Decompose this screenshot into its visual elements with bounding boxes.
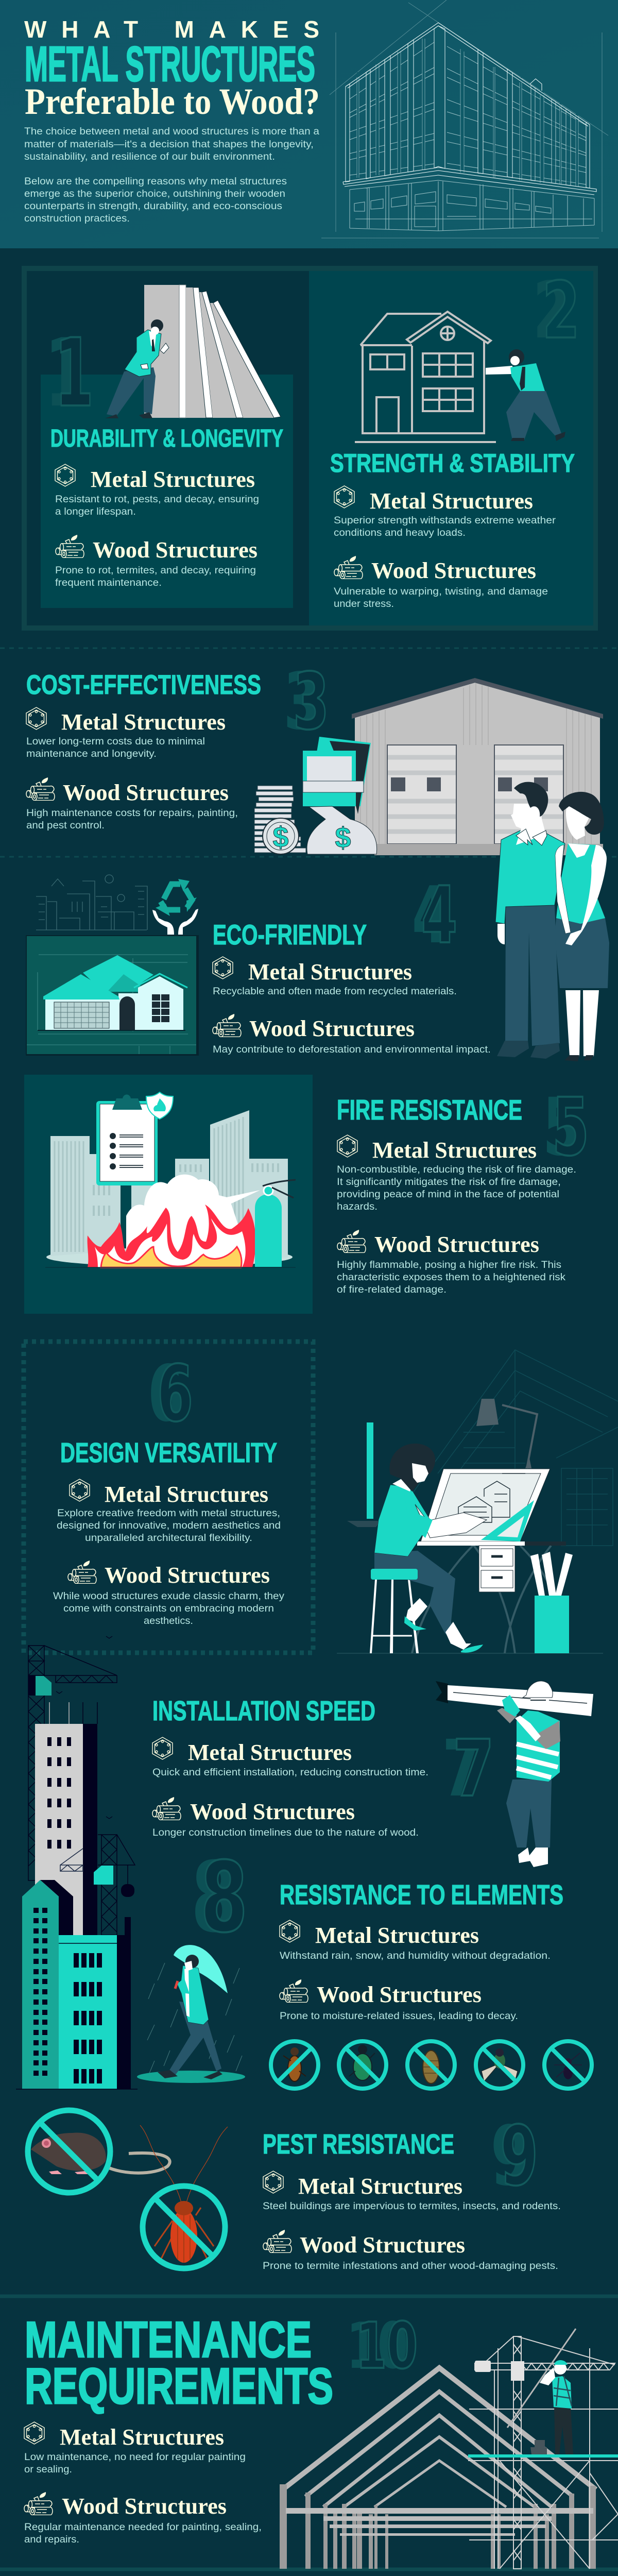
block: metal fire: Non-combustible, reducing the risk of fire damage.	[337, 1164, 576, 1175]
panel: resistance to elements	[137, 1841, 592, 2089]
block: wood cost: Wood Structures	[63, 780, 229, 805]
block: wood durability	[55, 535, 258, 588]
illustration: no cockroach	[140, 2125, 228, 2268]
heading: fire resistance: FIRE RESISTANCE	[337, 1094, 522, 1126]
block: wood eco: Wood Structures	[249, 1016, 415, 1041]
heading: maintenance requirements	[25, 2311, 333, 2414]
heading: design versatility: DESIGN VERSATILITY	[60, 1437, 277, 1468]
illustration: building fire and extinguisher	[45, 1092, 296, 1267]
title: preferable to wood: Preferable to Wood?	[25, 81, 320, 122]
illustration: house blueprint card	[26, 935, 199, 1056]
block: metal pests: Metal Structures	[298, 2174, 462, 2199]
panel: installation speed	[16, 1636, 593, 2089]
icon: no green beetle	[339, 2041, 386, 2089]
block: metal durability	[55, 464, 259, 517]
block: wood durability: frequent maintenance.	[55, 577, 162, 588]
number 3: 3	[293, 656, 329, 747]
illustration: faint blueprint background	[412, 1350, 618, 1653]
block: wood elements	[280, 1979, 518, 2022]
block: wood cost	[26, 777, 238, 831]
illustration: construction towers	[16, 1636, 138, 2089]
number 8: 8	[191, 1841, 238, 1954]
block: wood maintenance: Wood Structures	[62, 2494, 227, 2519]
number 1: 1	[55, 318, 94, 428]
illustration: man holding falling panels	[105, 285, 281, 418]
block: metal strength: Metal Structures	[370, 488, 533, 514]
number 9: 9	[500, 2109, 538, 2204]
icon: no beetle	[271, 2041, 318, 2089]
icons: no-pest row	[271, 2041, 592, 2089]
intro text	[24, 126, 319, 224]
illustration: city outline	[36, 875, 147, 930]
title: metal structures: METAL STRUCTURES	[25, 37, 315, 92]
illustration: blueprint building	[321, 0, 608, 238]
illustration: no rat	[28, 2110, 170, 2193]
number 5: 5	[552, 1081, 589, 1174]
block: metal cost	[26, 707, 226, 759]
number 5: 5	[543, 1081, 580, 1174]
block: metal pests: Steel buildings are impervious to termites, insects, and rodents.	[263, 2200, 561, 2212]
block: wood design: While wood structures exude classic charm, they	[53, 1590, 284, 1602]
block: metal durability: Metal Structures	[91, 467, 255, 492]
number 4: 4	[412, 870, 448, 961]
block: wood durability: Wood Structures	[93, 537, 258, 563]
block: wood design: Wood Structures	[105, 1563, 270, 1588]
block: metal strength: conditions and heavy loads.	[334, 527, 466, 538]
block: metal installation	[152, 1737, 428, 1778]
block: wood maintenance	[24, 2492, 262, 2545]
block: wood design: come with constraints on embracing modern	[63, 1603, 274, 1614]
block: wood fire: of fire-related damage.	[337, 1284, 447, 1295]
heading: maintenance requirements: MAINTENANCE	[25, 2311, 312, 2368]
number 2: 2	[533, 265, 571, 356]
block: metal design: Explore creative freedom with metal structures,	[57, 1507, 280, 1519]
intro text: The choice between metal and wood structures is more than a	[24, 126, 319, 137]
block: metal fire	[337, 1135, 576, 1212]
illustration: couple	[495, 782, 609, 1061]
number 1: 1	[45, 318, 84, 428]
number 3: 3	[284, 656, 320, 747]
illustration: steel frame with scaffold	[280, 2329, 618, 2569]
block: metal installation: Metal Structures	[188, 1740, 352, 1765]
block: wood elements: Prone to moisture-related issues, leading to decay.	[280, 2010, 518, 2022]
block: metal cost: Metal Structures	[61, 709, 226, 735]
block: metal pests	[263, 2171, 561, 2212]
block: wood installation: Wood Structures	[190, 1799, 355, 1824]
intro text: Below are the compelling reasons why metal structures	[24, 176, 287, 187]
block: wood cost: and pest control.	[26, 820, 105, 831]
panel: fire resistance	[24, 1075, 589, 1314]
icon: no termite	[407, 2041, 455, 2089]
block: wood maintenance: Regular maintenance needed for painting, sealing,	[24, 2521, 262, 2533]
block: wood strength	[334, 556, 548, 609]
intro text: construction practices.	[24, 213, 130, 224]
illustration: man pushing house	[355, 312, 565, 442]
block: wood fire: Wood Structures	[374, 1232, 539, 1257]
panel: eco-friendly	[26, 870, 491, 1056]
block: metal strength	[334, 486, 556, 538]
block: wood strength: Vulnerable to warping, twisting, and damage	[334, 586, 548, 597]
block: wood strength: Wood Structures	[371, 558, 536, 583]
block: wood design	[53, 1561, 284, 1626]
block: metal elements	[280, 1920, 551, 1961]
block: metal strength: Superior strength withstands extreme weather	[334, 515, 556, 526]
block: metal maintenance: or sealing.	[24, 2464, 72, 2475]
block: metal maintenance: Metal Structures	[60, 2425, 224, 2450]
intro text: sustainability, and resilience of our built environment.	[24, 151, 275, 162]
block: wood maintenance: and repairs.	[24, 2534, 79, 2545]
panel: design versatility	[24, 1342, 618, 1653]
block: metal elements: Withstand rain, snow, and humidity without degradation.	[280, 1950, 551, 1961]
block: wood cost: High maintenance costs for repairs, painting,	[26, 807, 238, 819]
panel: maintenance requirements	[24, 2310, 618, 2569]
block: wood elements: Wood Structures	[317, 1982, 482, 2007]
illustration: money: $	[272, 821, 289, 853]
block: metal cost: maintenance and longevity.	[26, 748, 157, 759]
number 7: 7	[453, 1723, 494, 1814]
block: wood eco: May contribute to deforestation and environmental impact.	[213, 1044, 491, 1055]
illustration: money: $	[335, 821, 351, 854]
number 9: 9	[491, 2109, 529, 2204]
number 6: 6	[157, 1349, 193, 1439]
number 7: 7	[442, 1723, 480, 1814]
illustration: woman at drafting table	[337, 1399, 603, 1653]
block: wood installation	[152, 1797, 419, 1838]
illustration: steel garage	[352, 678, 603, 855]
block: metal fire: providing peace of mind in the face of potential	[337, 1189, 559, 1200]
number 10: 10	[347, 2310, 408, 2383]
block: wood pests: Wood Structures	[300, 2232, 465, 2258]
heading: pest resistance: PEST RESISTANCE	[263, 2129, 454, 2160]
block: metal eco: Recyclable and often made from recycled materials.	[213, 986, 457, 997]
intro text: emerge as the superior choice, outshining their wooden	[24, 188, 285, 199]
block: metal maintenance	[24, 2422, 246, 2475]
icon: recycle and hands	[152, 879, 198, 935]
intro text: matter of materials—it's a decision that shapes the longevity,	[24, 139, 314, 150]
block: metal design	[57, 1479, 281, 1544]
heading: installation speed: INSTALLATION SPEED	[152, 1696, 375, 1726]
block: wood installation: Longer construction timelines due to the nature of wood.	[152, 1827, 419, 1838]
block: metal installation: Quick and efficient installation, reducing construction time.	[152, 1767, 428, 1778]
panel: durability card	[41, 375, 293, 608]
heading: durability and longevity: DURABILITY & LONGEVITY	[50, 425, 283, 452]
block: wood fire	[337, 1230, 565, 1295]
block: wood fire: characteristic exposes them to a heightened risk	[337, 1272, 565, 1283]
number 2: 2	[542, 265, 580, 356]
block: wood pests	[263, 2230, 558, 2272]
block: metal fire: hazards.	[337, 1201, 377, 1212]
block: metal durability: Resistant to rot, pests, and decay, ensuring	[55, 494, 259, 505]
illustration: man with umbrella in rain	[137, 1945, 245, 2083]
heading: cost-effectiveness: COST-EFFECTIVENESS	[26, 670, 261, 700]
block: wood eco	[213, 1014, 491, 1055]
block: metal design: designed for innovative, modern aesthetics and	[57, 1520, 281, 1531]
block: metal elements: Metal Structures	[315, 1923, 479, 1948]
illustration: worker carrying beam	[436, 1681, 593, 1867]
illustration: money	[254, 737, 377, 854]
intro text: counterparts in strength, durability, and eco-conscious	[24, 200, 282, 212]
number 8: 8	[200, 1841, 248, 1954]
title: what makes: WHAT MAKES	[24, 16, 319, 43]
block: metal design: Metal Structures	[105, 1482, 268, 1507]
heading: eco-friendly: ECO-FRIENDLY	[213, 919, 367, 951]
block: metal eco	[213, 957, 457, 997]
block: metal eco: Metal Structures	[248, 959, 412, 985]
block: wood durability: Prone to rot, termites, and decay, requiring	[55, 565, 256, 576]
heading: maintenance requirements: REQUIREMENTS	[25, 2358, 333, 2414]
block: metal cost: Lower long-term costs due to minimal	[26, 736, 205, 747]
block: wood fire: Highly flammable, posing a higher fire risk. This	[337, 1259, 561, 1270]
icon: no spider	[544, 2041, 592, 2089]
block: wood strength: under stress.	[334, 598, 394, 609]
block: metal fire: It significantly mitigates the risk of fire damage,	[337, 1176, 561, 1188]
number 4: 4	[421, 870, 457, 961]
block: metal durability: a longer lifespan.	[55, 506, 136, 517]
number 10: 10	[356, 2310, 418, 2383]
number 6: 6	[148, 1349, 184, 1439]
panel: durability and strength frame	[22, 265, 598, 631]
block: wood pests: Prone to termite infestations and other wood-damaging pests.	[263, 2260, 558, 2272]
block: metal maintenance: Low maintenance, no need for regular painting	[24, 2451, 246, 2463]
panel: cost-effectiveness	[26, 656, 609, 1061]
block: metal design: unparalleled architectural flexibility.	[85, 1532, 252, 1544]
block: wood design: aesthetics.	[144, 1615, 193, 1626]
panel: header	[0, 0, 618, 248]
icon: no fly	[476, 2041, 523, 2089]
panel: pest resistance	[28, 2109, 561, 2272]
block: metal fire: Metal Structures	[372, 1138, 537, 1163]
